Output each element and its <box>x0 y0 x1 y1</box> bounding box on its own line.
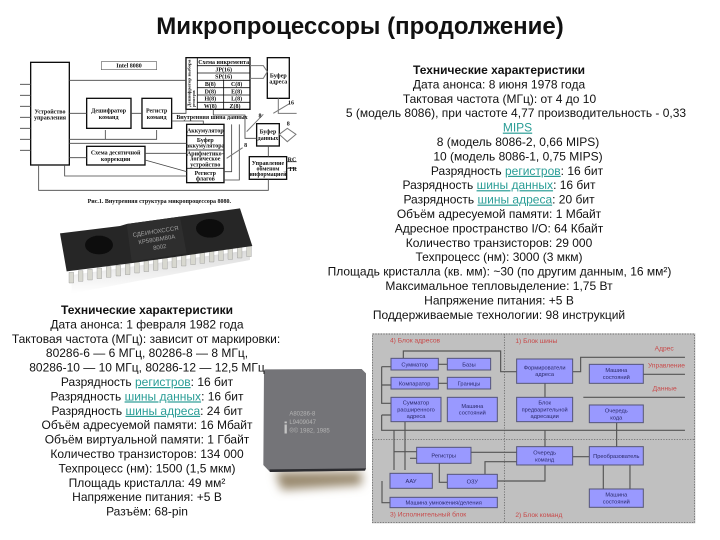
function blocks: ОЗУ <box>467 480 478 486</box>
internal data bus label: Внутренняя шина данных <box>176 115 248 121</box>
text block: 80286 specifications: Разрядность шины данных: 16 бит <box>51 389 244 403</box>
control unit block: управления <box>34 116 67 122</box>
decimal correction block: коррекции <box>101 157 131 163</box>
block boundaries <box>373 334 695 523</box>
function blocks: Сумматор <box>401 362 428 368</box>
text block: 8086 specifications: Поддерживаемые технологии: 98 инструкций <box>373 308 625 322</box>
register table: регистров <box>192 90 196 107</box>
function blocks: Компаратор <box>399 381 430 387</box>
text block: 8086 specifications: Дата анонса: 8 июня 1978 года <box>413 77 585 91</box>
text block: 80286 specifications: 80286-6 — 6 МГц, 80286-8 — 8 МГц, <box>46 346 248 360</box>
text block: 8086 specifications: Объём адресуемой памяти: 1 Мбайт <box>397 207 602 221</box>
title: Микропроцессоры (продолжение) <box>156 13 564 40</box>
chip marking: СДЕИНОХСССЯ <box>132 226 179 239</box>
connecting lines <box>382 351 685 503</box>
function blocks: адреса <box>407 414 426 420</box>
section labels <box>390 338 685 519</box>
ALU column: устройство <box>190 162 220 169</box>
register table: Схема инкремента <box>198 60 249 66</box>
decimal correction block: Схема десятичной <box>91 150 141 157</box>
address buffer block: адреса <box>269 80 287 86</box>
function blocks: Машина умножения/деления <box>406 500 482 506</box>
function blocks: Сумматор <box>403 400 429 406</box>
chip marking: i <box>283 418 288 437</box>
photo: 8080 DIP chip <box>60 208 252 293</box>
text block: 8086 specifications: Количество транзисторов: 29 000 <box>406 236 593 250</box>
text block: 80286 specifications: Дата анонса: 1 февраля 1982 года <box>50 317 244 331</box>
chip marking: 8002 <box>153 244 168 252</box>
function blocks: адреса <box>535 372 555 378</box>
instruction register block: команд <box>147 115 167 121</box>
text block: 80286 specifications: Разрядность шины адреса: 24 бит <box>51 404 243 418</box>
ALU column: флагов <box>196 176 216 183</box>
text block: 8086 specifications: 10 (модель 8086-1, 0,75 MIPS) <box>433 149 603 163</box>
text block: 8086 specifications: Максимальное тепловыделение: 1,75 Вт <box>385 279 613 293</box>
caption: Рис.1. Внутренняя структура микропроцессора 8080. <box>88 199 232 205</box>
section labels: Данные <box>653 386 677 393</box>
connecting lines and arrows: 8 <box>244 143 247 149</box>
function blocks: ААУ <box>406 479 417 485</box>
ALU column: Арифметико- <box>187 150 224 157</box>
control unit block <box>31 62 69 165</box>
Intel 8080 label: Intel 8080 <box>116 64 142 70</box>
chip marking <box>283 412 330 437</box>
section labels: 1) Блок шины <box>515 338 558 345</box>
data buffer block: данных <box>258 136 278 142</box>
text block: 8086 specifications: Технические характеристики <box>413 63 585 77</box>
register table: E(8) <box>231 88 242 95</box>
text block: 8086 specifications: Площадь кристалла (кв. мм): ~30 (по другим данным, 16 мм²) <box>328 265 671 279</box>
text block: 8086 specifications <box>328 63 686 322</box>
function blocks: Формирователи <box>524 365 566 371</box>
connecting lines and arrows: 16 <box>288 100 294 106</box>
text block: 80286 specifications: Техпроцесс (нм): 1500 (1,5 мкм) <box>59 461 235 475</box>
chip marking: A80286-8 <box>289 412 316 418</box>
function blocks: Машина <box>605 493 628 499</box>
text block: 80286 specifications: Объём адресуемой памяти: 16 Мбайт <box>41 418 253 432</box>
text block: 80286 specifications: Количество транзисторов: 134 000 <box>50 447 244 461</box>
text block: 8086 specifications: Разрядность шины данных: 16 бит <box>403 178 596 192</box>
text block: 80286 specifications: 80286-10 — 10 МГц, 80286-12 — 12,5 МГц <box>29 361 265 375</box>
chip marking <box>132 226 182 255</box>
text block: 80286 specifications <box>12 303 280 519</box>
chip marking: ®© 1982, 1985 <box>289 427 330 434</box>
connecting lines and arrows: TR <box>288 167 297 173</box>
section labels: 2) Блок команд <box>515 512 562 519</box>
photo: 80286 PGA chip <box>263 369 366 490</box>
section labels: Адрес <box>655 345 674 352</box>
function blocks: расширенного <box>397 407 435 413</box>
function blocks: Машина <box>605 368 628 374</box>
function blocks: Регистры <box>431 453 456 459</box>
section labels: 3) Исполнительный блок <box>390 511 466 519</box>
ALU column: Буфер <box>197 137 214 144</box>
address buffer block <box>267 58 289 98</box>
function blocks: Блок <box>538 400 551 406</box>
exchange control block: обменом <box>256 165 279 172</box>
text block: 80286 specifications: Объём виртуальной памяти: 1 Гбайт <box>45 433 250 447</box>
function blocks: состояний <box>603 374 630 381</box>
instruction decoder block: команд <box>99 115 119 121</box>
function blocks: предварительной <box>522 406 568 413</box>
function blocks: команд <box>535 457 555 463</box>
chip marking: L9409047 <box>289 420 317 426</box>
function blocks: Границы <box>458 381 480 387</box>
register table: Дешифратор выбора <box>188 59 192 107</box>
address buffer block: Буфер <box>270 72 287 79</box>
connecting lines and arrows: 8 <box>258 114 261 120</box>
chip body <box>60 208 252 271</box>
text block: 80286 specifications: Напряжение питания: +5 В <box>72 490 222 504</box>
Intel 8080 label <box>101 62 157 70</box>
function blocks: Очередь <box>605 409 628 415</box>
exchange control block: информацией <box>249 171 287 178</box>
control unit block: Устройство <box>35 108 65 115</box>
register table <box>186 58 250 110</box>
text block: 8086 specifications: Напряжение питания: +5 В <box>424 293 574 307</box>
decimal correction block <box>87 146 145 165</box>
function blocks: Базы <box>462 362 476 368</box>
section labels: Управление <box>648 362 685 369</box>
section labels: 4) Блок адресов <box>390 338 441 345</box>
ALU column: Регистр <box>195 171 217 177</box>
text block: 8086 specifications: 8 (модель 8086-2, 0,66 MIPS) <box>437 135 599 149</box>
data buffer block <box>257 124 279 146</box>
connecting lines and arrows: 8 <box>287 122 290 128</box>
ALU column: Аккумулятор <box>187 128 224 134</box>
text block: 8086 specifications: Техпроцесс (нм): 3000 (3 мкм) <box>416 250 582 264</box>
exchange control block <box>249 157 287 179</box>
text block: 8086 specifications: MIPS <box>503 121 532 135</box>
text block: 80286 specifications: Разъём: 68-pin <box>106 505 188 519</box>
text block: 80286 specifications: Технические характеристики <box>61 303 233 317</box>
register table: JP(16) <box>215 66 232 73</box>
register table: L(8) <box>231 96 242 103</box>
diagram: 80286 block structure <box>372 333 695 523</box>
text block: 8086 specifications: Разрядность регистров: 16 бит <box>431 164 604 178</box>
text block: 80286 specifications: Разрядность регистров: 16 бит <box>61 375 234 389</box>
instruction register block: Регистр <box>146 109 168 115</box>
register table: B(8) <box>205 81 216 88</box>
connecting lines and arrows: RC <box>288 158 296 164</box>
function blocks: адресации <box>531 414 559 420</box>
function blocks: Машина <box>461 404 484 410</box>
text block: 8086 specifications: Тактовая частота (МГц): от 4 до 10 <box>403 92 596 106</box>
function blocks: Очередь <box>533 451 556 457</box>
register table: D(8) <box>205 88 216 95</box>
function blocks: кода <box>610 415 623 421</box>
function blocks: Преобразователь <box>593 454 640 460</box>
text block: 8086 specifications: 5 (модель 8086), при частоте 4,77 производительность - 0,33 <box>346 106 686 120</box>
gray background panel <box>372 333 695 523</box>
register table: H(8) <box>204 96 216 103</box>
text block: 8086 specifications: Разрядность шины адреса: 20 бит <box>403 193 595 207</box>
ALU column: аккумулятора <box>186 144 225 150</box>
register table: W(8) <box>204 103 217 110</box>
function blocks: состояний <box>603 499 630 506</box>
diagram: Intel 8080 internal structure <box>20 58 297 205</box>
chip body <box>263 369 366 472</box>
ALU column: логическое <box>190 157 221 163</box>
instruction decoder block: Дешифратор <box>91 108 127 115</box>
data buffer block: Буфер <box>260 129 277 136</box>
function blocks: состояний <box>459 410 486 417</box>
ALU column <box>186 124 225 183</box>
register table: C(8) <box>231 81 242 88</box>
chip marking: КР580ВМ80А <box>138 234 176 246</box>
text block: 80286 specifications: Тактовая частота (МГц): зависит от маркировки: <box>12 332 280 346</box>
function blocks <box>390 358 643 508</box>
exchange control block: Управление <box>252 161 285 167</box>
pins <box>69 246 251 293</box>
chip shadow <box>275 472 362 490</box>
text block: 80286 specifications: Площадь кристалла: 49 мм² <box>69 476 225 490</box>
register table: SP(16) <box>215 74 232 81</box>
text block: 8086 specifications: Адресное пространство I/O: 64 Кбайт <box>395 221 604 235</box>
instruction decoder block <box>87 98 131 128</box>
register table: Z(8) <box>229 103 240 110</box>
instruction register block <box>142 98 172 128</box>
connecting lines and arrows <box>20 66 297 190</box>
